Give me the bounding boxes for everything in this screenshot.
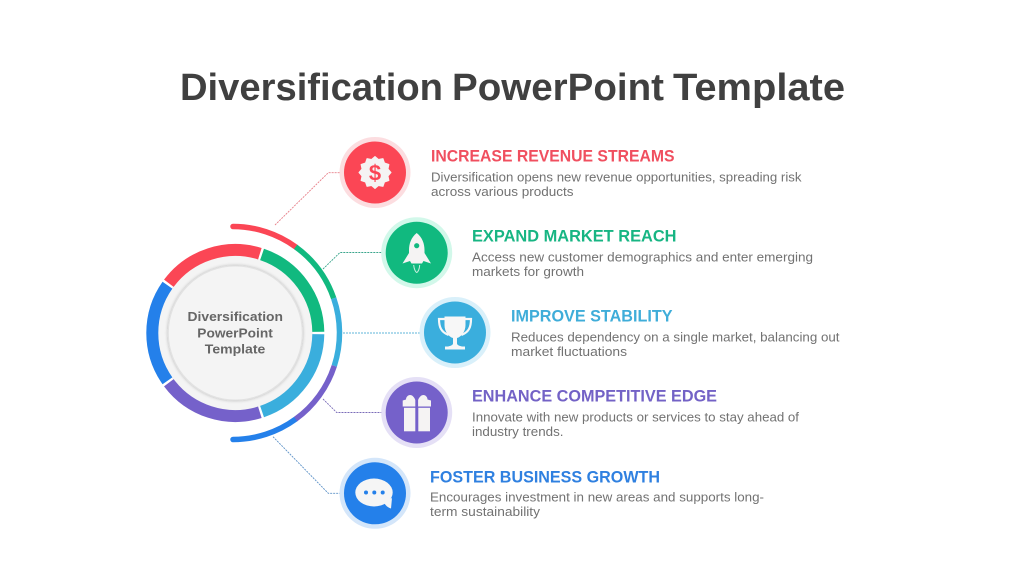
center label: Template bbox=[205, 342, 265, 356]
heading and text: market reach bbox=[472, 228, 813, 279]
heading and text: stability bbox=[511, 308, 840, 359]
title: Template bbox=[673, 67, 845, 109]
connector: revenue bbox=[275, 173, 341, 225]
heading and text: market reach: Access new customer demographics and enter emerging bbox=[472, 250, 813, 264]
heading and text: business growth: term sustainability bbox=[430, 505, 541, 519]
connector: business growth bbox=[273, 437, 341, 493]
icon: dollar badge bbox=[340, 137, 410, 208]
heading and text: market reach: EXPAND MARKET REACH bbox=[472, 228, 676, 246]
ring background bbox=[157, 255, 313, 411]
title: PowerPoint bbox=[452, 67, 664, 109]
center label bbox=[188, 309, 283, 356]
outer arc bbox=[233, 226, 340, 440]
icon: rocket bbox=[381, 217, 452, 288]
connector: stability bbox=[343, 332, 421, 334]
heading and text: revenue: INCREASE REVENUE STREAMS bbox=[431, 148, 674, 166]
heading and text: competitive edge: ENHANCE COMPETITIVE EDGE bbox=[472, 388, 717, 406]
segmented ring bbox=[152, 250, 318, 416]
heading and text: competitive edge: industry trends. bbox=[472, 425, 564, 439]
icon: gift bbox=[381, 377, 452, 448]
center label: Diversification bbox=[188, 309, 283, 324]
heading and text: revenue bbox=[431, 148, 802, 199]
heading and text: stability: IMPROVE STABILITY bbox=[511, 308, 672, 326]
connector: competitive edge bbox=[323, 399, 383, 412]
heading and text: stability: market fluctuations bbox=[511, 345, 627, 359]
heading and text: competitive edge bbox=[472, 388, 800, 439]
icon: trophy bbox=[420, 297, 490, 368]
central diagram bbox=[152, 226, 340, 440]
icon: dollar badge: $ bbox=[369, 160, 381, 186]
heading and text: market reach: markets for growth bbox=[472, 265, 584, 279]
heading and text: competitive edge: Innovate with new products or services to stay ahead of bbox=[472, 410, 800, 424]
title: Diversification bbox=[180, 67, 443, 109]
connector: market reach bbox=[323, 252, 383, 269]
title bbox=[180, 67, 845, 109]
heading and text: business growth: FOSTER BUSINESS GROWTH bbox=[430, 468, 660, 486]
icon: speech bubble bbox=[340, 458, 410, 529]
heading and text: stability: Reduces dependency on a single market, balancing out bbox=[511, 330, 840, 344]
center label: PowerPoint bbox=[197, 325, 273, 340]
heading and text: business growth bbox=[430, 468, 764, 519]
heading and text: revenue: Diversification opens new revenue opportunities, spreading risk bbox=[431, 170, 802, 184]
heading and text: revenue: across various products bbox=[431, 185, 574, 199]
inner circle bbox=[168, 266, 302, 400]
heading and text: business growth: Encourages investment in new areas and supports long- bbox=[430, 490, 764, 504]
